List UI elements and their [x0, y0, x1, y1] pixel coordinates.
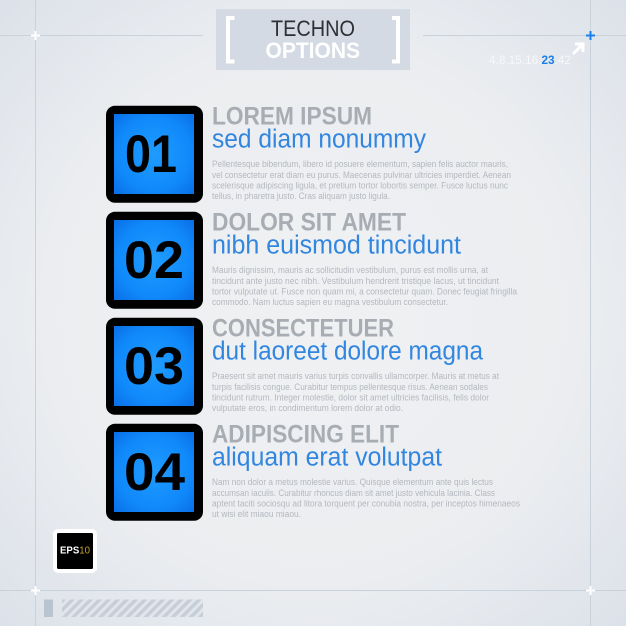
heading 04: ADIPISCING ELIT	[212, 420, 399, 448]
badge 04	[106, 424, 203, 521]
body text 04: accumsan iaculis. Curabitur rhoncus diam sit amet justo vehicula lacinia. Class	[212, 488, 496, 498]
body text 01: tellus, in pharetra justo. Cras aliquam justo ligula.	[212, 191, 390, 201]
body text 04	[212, 477, 521, 519]
panel: item 01	[106, 102, 511, 203]
badge 03: 03	[124, 337, 184, 396]
body text 04: ut wisi elit miaou miaou.	[212, 509, 301, 519]
body text 02: tortor vulputate ut. Fusce non quam mi, a consectetur quam. Donec feugiat fringilla	[212, 286, 517, 296]
EPS10 badge: EPS10	[60, 544, 90, 556]
title: TECHNO: TECHNO	[271, 16, 355, 41]
body text 03	[212, 371, 500, 413]
heading 01: LOREM IPSUM	[212, 102, 372, 130]
body text 02: Mauris dignissim, mauris ac sollicitudin vestibulum, purus est mollis urna, at	[212, 265, 489, 275]
badge 02: 02	[124, 231, 184, 290]
body text 01: scelerisque adipiscing ligula, et pretium tortor lobortis semper. Fusce luctus nunc	[212, 180, 509, 190]
subheading 04: aliquam erat volutpat	[212, 444, 442, 472]
panel: item 02	[106, 208, 517, 309]
footer hatch strip	[62, 600, 203, 617]
icon: arrow	[573, 44, 583, 54]
badge 01	[106, 106, 203, 203]
title: OPTIONS: OPTIONS	[266, 38, 360, 63]
body text 03: tincidunt rutrum. Integer molestie, dolor sit amet ultricies facilisis, felis dolor	[212, 392, 489, 402]
body text 02: commodo. Nam luctus sapien eu magna vestibulum consectetur.	[212, 297, 448, 307]
badge 01: 01	[125, 125, 177, 184]
left bracket	[228, 18, 234, 62]
body text 01: Pellentesque bibendum, libero id posuere elementum, sapien felis auctor mauris,	[212, 159, 508, 169]
body text 02	[212, 265, 517, 307]
panel: item 03	[106, 314, 500, 415]
heading 03: CONSECTETUER	[212, 314, 394, 342]
subheading 03: dut laoreet dolore magna	[212, 338, 484, 366]
title block	[216, 9, 410, 70]
right bracket	[392, 18, 398, 62]
heading 02: DOLOR SIT AMET	[212, 208, 406, 236]
body text 03: Praesent sit amet mauris varius turpis convallis ullamcorper. Mauris at metus at	[212, 371, 500, 381]
panel: item 04	[106, 420, 521, 521]
body text 03: turpis facilisis congue. Curabitur tempus pellentesque risus. Aenean sodales	[212, 382, 489, 392]
badge 02	[106, 212, 203, 309]
body text 02: tincidunt ante justo nec nibh. Vestibulum hendrerit tristique lacus, ut tincidunt	[212, 276, 500, 286]
badge 04: 04	[124, 443, 186, 502]
subheading 02: nibh euismod tincidunt	[212, 232, 461, 260]
body text 04: aptent taciti sociosqu ad litora torquent per conubia nostra, per inceptos himenaeos	[212, 498, 521, 508]
footer bar	[44, 600, 53, 617]
number sequence: 4.8.15.16.23.42	[489, 55, 571, 67]
subheading 01: sed diam nonummy	[212, 126, 426, 154]
body text 01	[212, 159, 511, 201]
EPS10 badge	[53, 529, 97, 573]
body text 04: Nam non dolor a metus molestie varius. Quisque elementum ante quis lectus	[212, 477, 494, 487]
badge 03	[106, 318, 203, 415]
body text 03: vulputate eros, in condimentum lorem dolor at odio.	[212, 403, 403, 413]
body text 01: vel consectetur erat diam eu purus. Maecenas pulvinar ultricies imperdiet. Aenean	[212, 170, 511, 180]
